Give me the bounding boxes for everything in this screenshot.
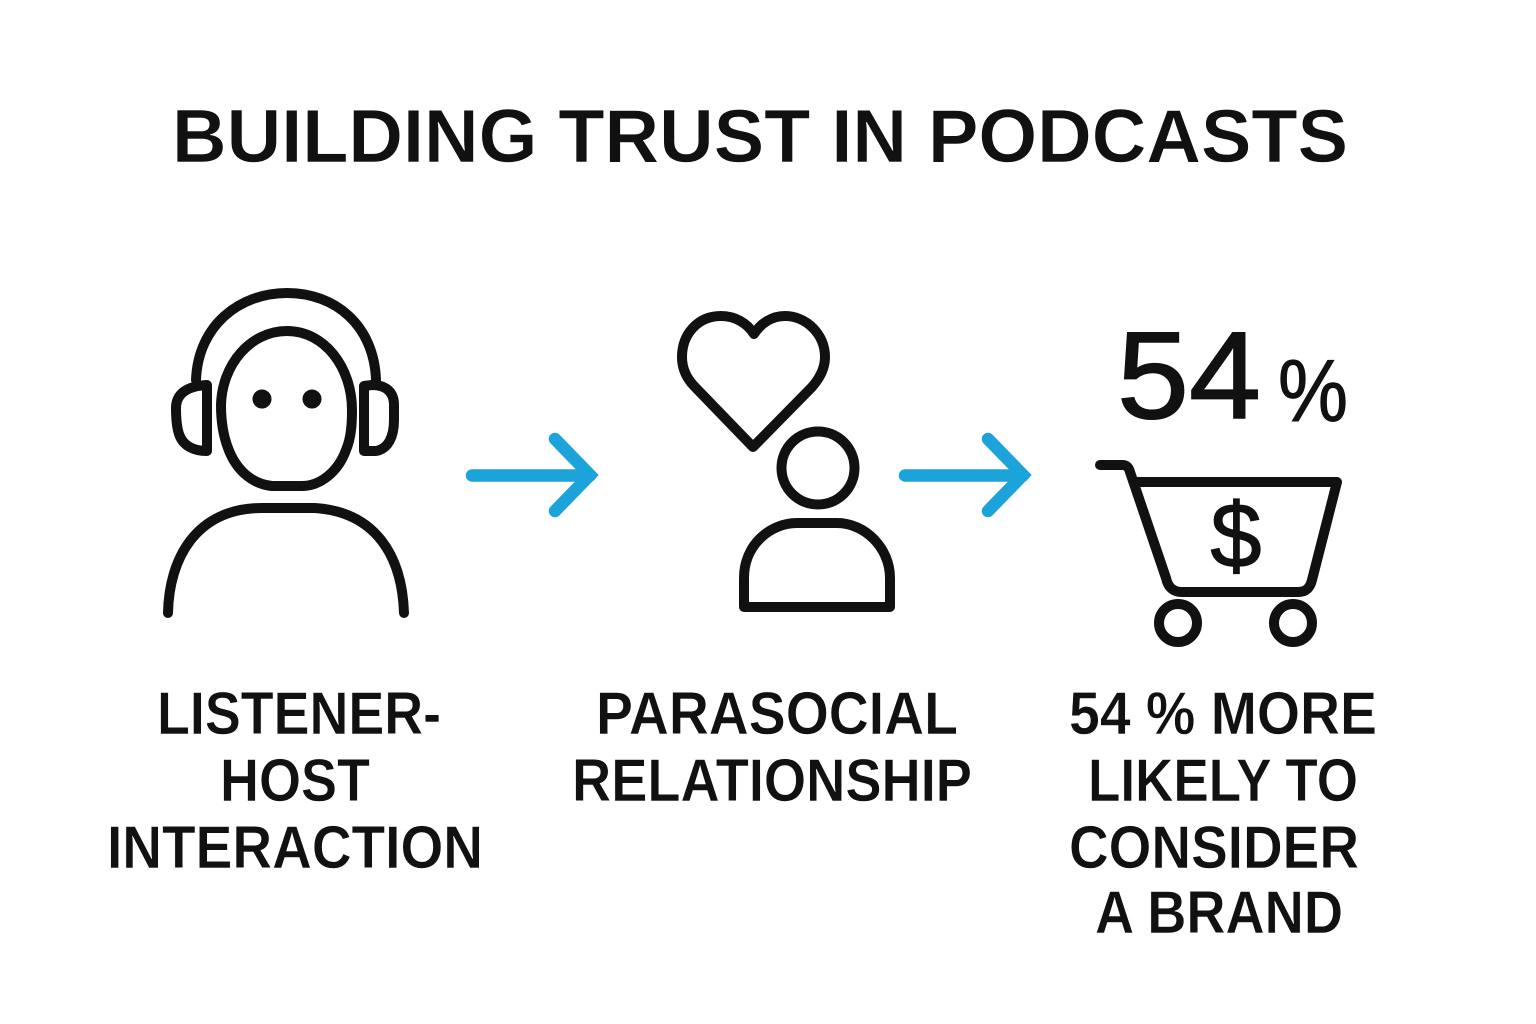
statistic: 54 percent	[1117, 307, 1348, 445]
label: 54 percent more likely to consider a brand: A BRAND	[1095, 879, 1343, 946]
label: 54 percent more likely to consider a brand: LIKELY TO	[1088, 747, 1358, 814]
icon: listener with headphones	[168, 293, 404, 613]
label: 54 percent more likely to consider a brand: CONSIDER	[1069, 814, 1359, 881]
statistic: 54 percent: 54	[1117, 307, 1261, 445]
label: parasocial relationship: PARASOCIAL	[596, 680, 958, 747]
arrow: interaction to relationship	[472, 439, 590, 511]
label: listener-host interaction: INTERACTION	[107, 814, 483, 881]
title: BUILDING TRUST IN PODCASTS	[172, 94, 1348, 178]
label: listener-host interaction: HOST	[220, 747, 370, 814]
label: parasocial relationship: RELATIONSHIP	[572, 747, 972, 814]
arrow: relationship to purchase	[905, 439, 1023, 511]
label: listener-host interaction: LISTENER-	[157, 680, 441, 747]
icon: shopping cart with dollar sign	[1100, 465, 1337, 642]
label: parasocial relationship	[572, 680, 972, 814]
icon: shopping cart with dollar sign: $	[1210, 485, 1262, 587]
label: 54 percent more likely to consider a brand: 54 % MORE	[1069, 680, 1377, 747]
icon: heart and person	[682, 316, 890, 607]
label: listener-host interaction	[107, 680, 483, 881]
label: 54 percent more likely to consider a brand	[1069, 680, 1377, 946]
statistic: 54 percent: %	[1278, 341, 1348, 440]
